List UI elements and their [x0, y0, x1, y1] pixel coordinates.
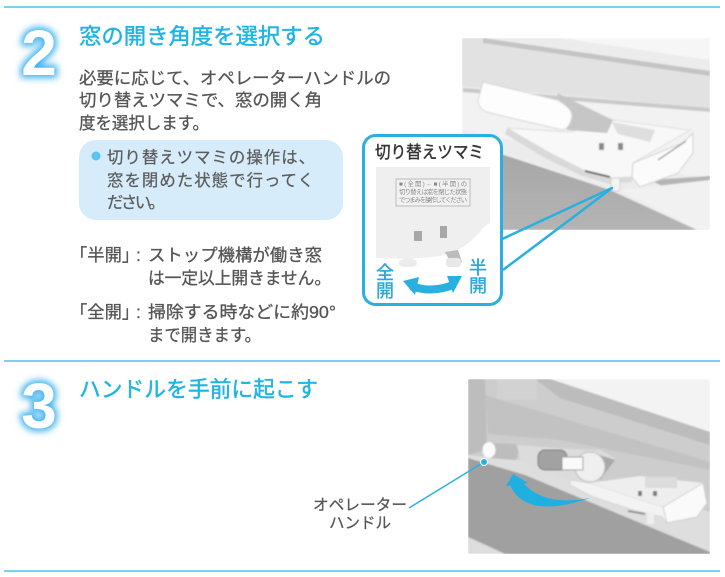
body text: step 2: 切り替えツマミで、窓の開く角 — [79, 90, 322, 110]
label: operator handle — [313, 496, 407, 532]
label: half open: 半 — [469, 258, 487, 278]
mode description: half open — [70, 245, 331, 288]
body text: step 2: 必要に応じて、オペレーターハンドルの — [79, 68, 391, 88]
mode description: half open: は一定以上開きません。 — [148, 268, 331, 288]
body text: step 2 — [79, 68, 391, 133]
note box: 切り替えツマミの操作は、 — [107, 149, 316, 167]
heading: step 2: 窓の開き角度を選択する — [79, 24, 325, 49]
lever body — [518, 445, 614, 474]
knob photo: でつまみを操作してください — [399, 195, 467, 204]
knob photo — [376, 167, 490, 268]
bottom divider — [4, 570, 720, 572]
callout title: 切り替えツマミ — [375, 143, 484, 162]
mode description: full open: 「全開」 — [70, 302, 139, 322]
mode description: full open — [70, 302, 336, 345]
mode description: full open: まで開きます。 — [148, 325, 261, 345]
end cap — [632, 133, 693, 187]
lever neck — [491, 444, 518, 460]
body text: step 2: 度を選択します。 — [79, 113, 209, 133]
mode description: half open: 「半開」 — [70, 245, 139, 265]
label: half open: 開 — [469, 276, 487, 296]
step number 2: 2 — [21, 17, 57, 89]
mode description: full open: : — [136, 302, 141, 322]
heading: step 3: ハンドルを手前に起こす — [79, 377, 318, 402]
note box: ださい。 — [107, 194, 166, 212]
step number 2: 2 — [21, 17, 57, 89]
photo: window handle, step 2 — [462, 38, 710, 230]
lower handle — [570, 481, 666, 519]
top divider — [4, 6, 720, 8]
label: half open — [469, 258, 487, 296]
icon: double-headed arrow — [403, 276, 462, 295]
step 2 section — [21, 17, 391, 345]
step number 3: 3 — [21, 370, 57, 442]
step number 3: 3 — [21, 370, 57, 442]
label: full open — [376, 263, 394, 301]
mode description: full open: 掃除する時などに約90° — [148, 302, 336, 322]
label: full open: 開 — [376, 281, 394, 301]
knob photo: 切り替えは窓を閉じた状態 — [399, 187, 468, 196]
middle divider — [4, 360, 720, 362]
note box — [79, 140, 343, 220]
callout: switch knob — [364, 136, 502, 304]
mode description: half open: : — [136, 245, 141, 265]
note box: 窓を閉めた状態で行ってく — [107, 172, 315, 190]
knob photo: ■(全開)←■(半開)の — [399, 179, 467, 188]
label: full open: 全 — [376, 263, 394, 283]
mode description: half open: ストップ機構が働き窓 — [148, 245, 322, 265]
step 3 section — [21, 370, 318, 442]
label: operator handle: ハンドル — [329, 515, 391, 532]
leader line: operator handle — [409, 458, 488, 508]
callout pointer — [500, 188, 612, 270]
base of handle — [507, 120, 690, 178]
icon: curved arrow — [506, 474, 590, 506]
label: operator handle: オペレーター — [313, 496, 407, 514]
photo: handle raised, step 3 — [468, 379, 710, 554]
